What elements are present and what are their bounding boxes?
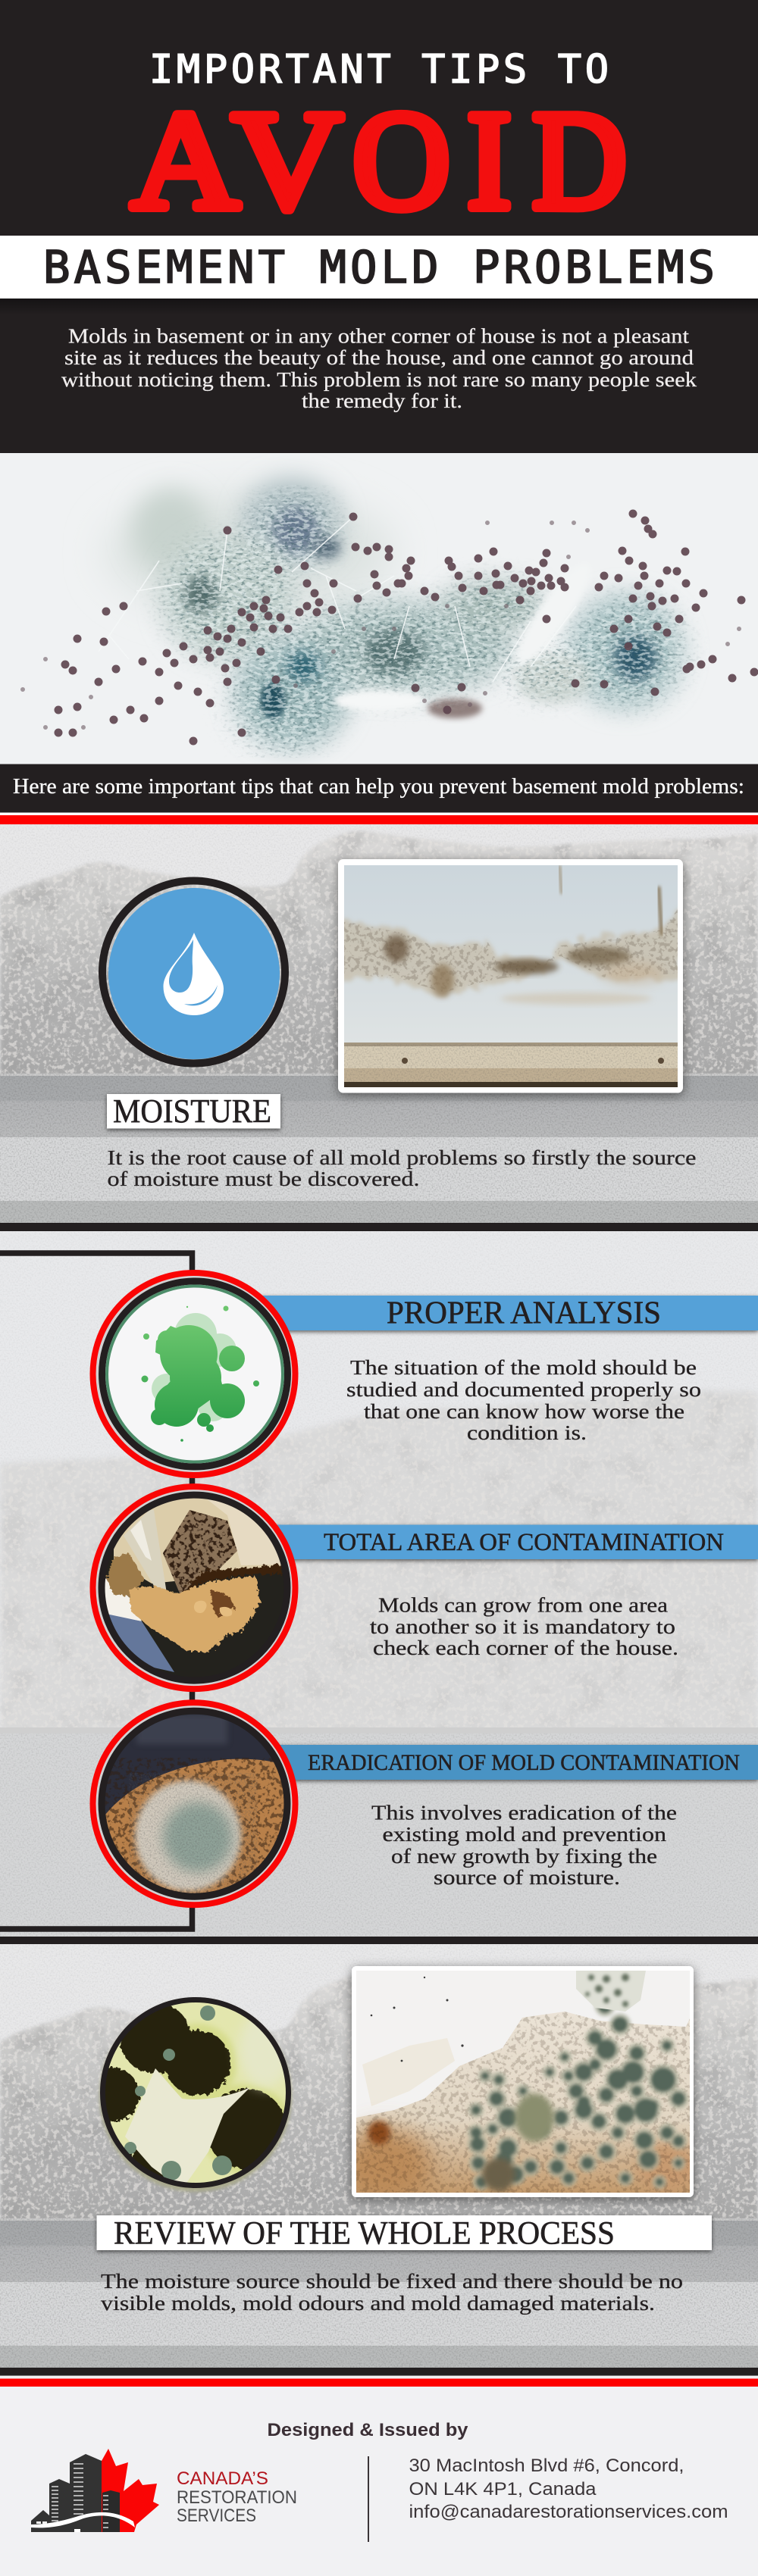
- logo icon: buildings and maple leaf: [31, 2449, 159, 2532]
- logo wordmark: RESTORATION: [177, 2487, 297, 2508]
- banner: total area: TOTAL AREA OF CONTAMINATION: [324, 1529, 724, 1556]
- subtitle band: BASEMENT MOLD PROBLEMS: [43, 241, 715, 293]
- proper analysis text: studied and documented properly so: [346, 1378, 701, 1401]
- eradication text: existing mold and prevention: [382, 1823, 667, 1846]
- moisture text: of moisture must be discovered.: [108, 1168, 420, 1190]
- intro paragraph: the remedy for it.: [302, 389, 462, 412]
- title word: avoid: [131, 83, 627, 239]
- banner: eradication: ERADICATION OF MOLD CONTAMINATION: [308, 1750, 740, 1775]
- logo wordmark: [177, 2468, 297, 2526]
- logo wordmark: CANADA’S: [177, 2468, 268, 2489]
- review text: visible molds, mold odours and mold damaged materials.: [101, 2292, 655, 2315]
- title word: avoid: A: [131, 83, 240, 239]
- total area text: to another so it is mandatory to: [370, 1615, 675, 1638]
- footer divider: [368, 2456, 369, 2542]
- banner: total area: [258, 1524, 758, 1559]
- intro paragraph: [61, 325, 697, 412]
- tips intro bar: Here are some important tips that can help you prevent basement mold problems:: [13, 775, 744, 799]
- eradication text: source of moisture.: [434, 1866, 620, 1889]
- title word: avoid: V: [232, 83, 343, 239]
- intro paragraph: site as it reduces the beauty of the house, and one cannot go around: [64, 346, 694, 369]
- divider bar: [0, 1937, 758, 1944]
- address: ON L4K 4P1, Canada: [409, 2479, 597, 2499]
- proper analysis text: condition is.: [467, 1421, 587, 1444]
- wall background: [0, 1231, 758, 1937]
- eradication text: of new growth by fixing the: [391, 1845, 657, 1868]
- footer heading: Designed & Issued by: [267, 2420, 468, 2440]
- proper analysis text: that one can know how worse the: [364, 1400, 684, 1423]
- wall background: [0, 1944, 758, 2368]
- title word: avoid: D: [532, 83, 627, 239]
- review text: [101, 2270, 683, 2315]
- title word: avoid: I: [467, 83, 512, 239]
- red stripe: [0, 815, 758, 824]
- banner: proper analysis: [258, 1296, 758, 1330]
- step circle: contaminated corner photo: [92, 1487, 296, 1689]
- eradication text: [371, 1802, 677, 1889]
- title line: important tips to: IMPORTANT TIPS TO: [149, 47, 609, 92]
- proper analysis text: The situation of the mold should be: [350, 1356, 697, 1379]
- connector line: [0, 1253, 193, 1929]
- panel: review of the whole process: [0, 1940, 758, 2368]
- tips intro bar: [0, 764, 758, 812]
- moisture text: [108, 1146, 697, 1190]
- address: [409, 2456, 728, 2522]
- banner: proper analysis: PROPER ANALYSIS: [387, 1296, 661, 1330]
- step circle: green mold icon: [92, 1273, 296, 1475]
- photo: water-stained wall: [334, 859, 683, 1093]
- intro paragraph: without noticing them. This problem is not rare so many people seek: [61, 368, 697, 391]
- intro paragraph: Molds in basement or in any other corner of house is not a pleasant: [68, 325, 690, 348]
- header panel: [0, 0, 758, 453]
- proper analysis text: [346, 1356, 701, 1444]
- address: 30 MacIntosh Blvd #6, Concord,: [409, 2456, 684, 2476]
- address: info@canadarestorationservices.com: [409, 2502, 728, 2522]
- moisture icon: [102, 880, 285, 1064]
- eradication text: This involves eradication of the: [371, 1802, 677, 1824]
- footer: [0, 2387, 758, 2576]
- heading: moisture: MOISTURE: [113, 1093, 271, 1130]
- logo wordmark: SERVICES: [177, 2506, 256, 2526]
- panel: moisture: [0, 796, 758, 1224]
- total area text: [370, 1594, 678, 1659]
- heading: review: REVIEW OF THE WHOLE PROCESS: [114, 2215, 615, 2252]
- banner: eradication: [258, 1745, 758, 1780]
- bottom divider bars: [0, 2368, 758, 2387]
- hero photo: mold spores: [0, 453, 758, 764]
- moisture text: It is the root cause of all mold problems so firstly the source: [108, 1146, 697, 1169]
- wall background: [0, 824, 758, 1223]
- total area text: check each corner of the house.: [373, 1637, 678, 1659]
- photo: mold on wall: [341, 1966, 697, 2205]
- photo: petri dish with mold: [85, 1996, 296, 2193]
- step circle: moldy bread photo: [92, 1702, 296, 1905]
- divider bar: [0, 1223, 758, 1231]
- review text: The moisture source should be fixed and there should be no: [101, 2270, 683, 2293]
- logo: [31, 2449, 297, 2532]
- panel: process steps: [0, 1231, 758, 1937]
- title word: avoid: O: [352, 83, 450, 239]
- total area text: Molds can grow from one area: [378, 1594, 668, 1617]
